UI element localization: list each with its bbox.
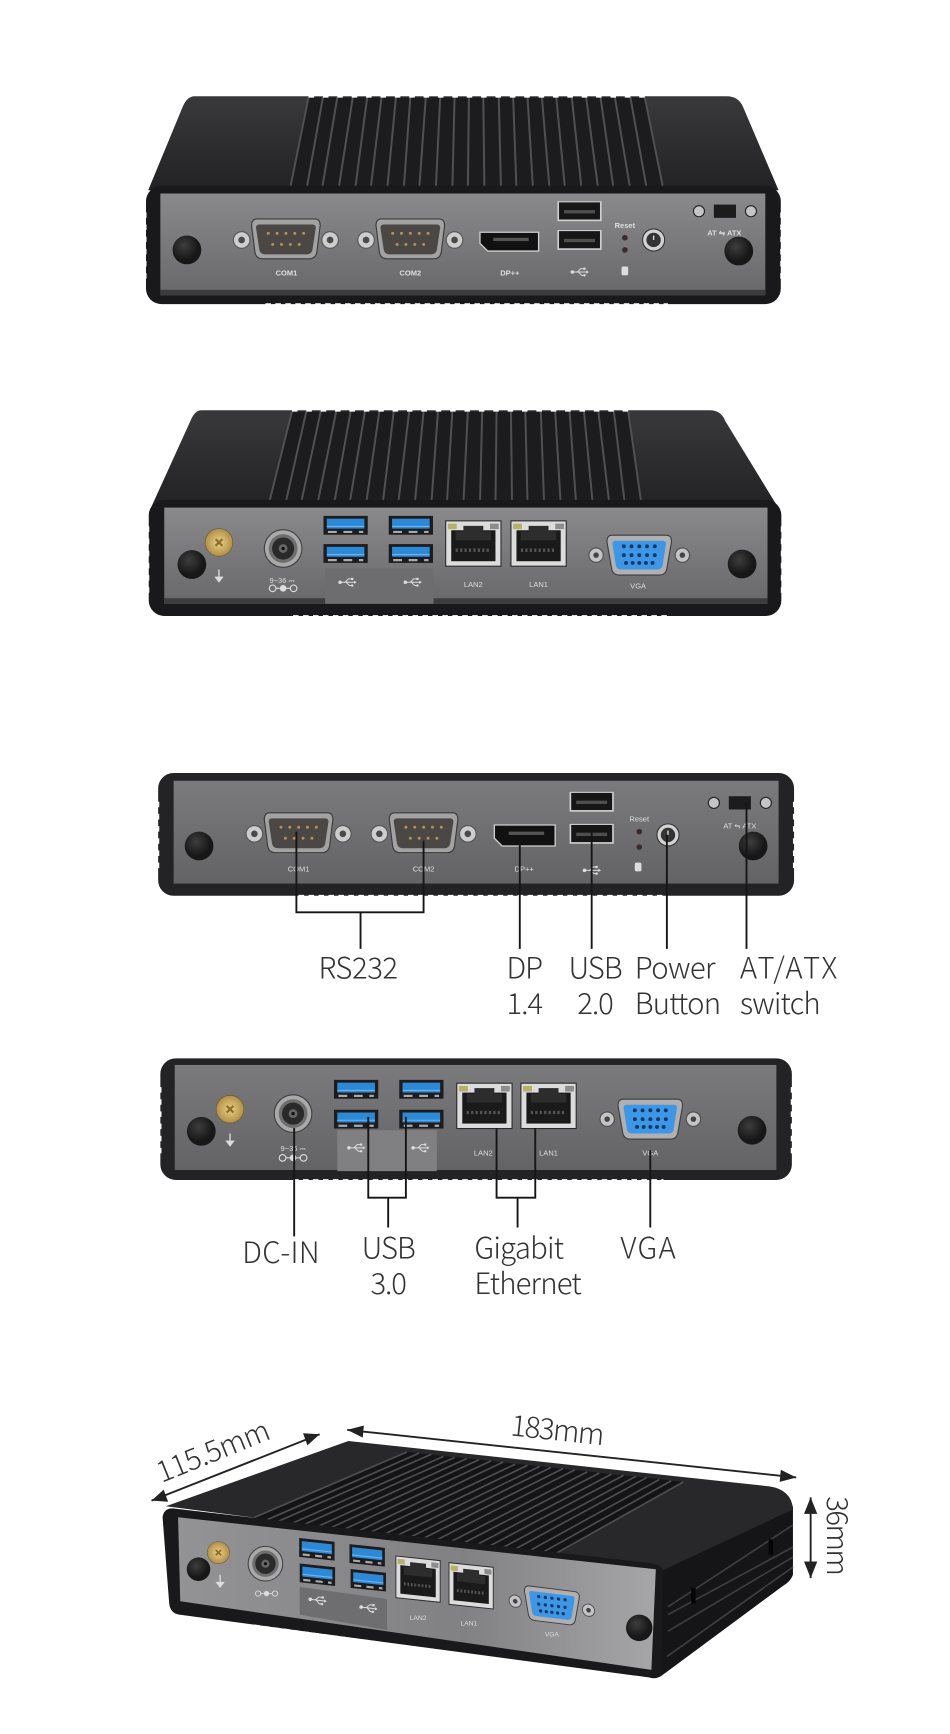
device 1 front panel	[160, 194, 765, 295]
panel labels: 9~36 ⎓	[281, 1144, 307, 1153]
storage icon	[635, 863, 641, 871]
label: Gigabit Ethernet	[474, 1225, 582, 1303]
USB 3.0 ports	[323, 516, 433, 563]
DC jack	[264, 530, 302, 567]
label: AT/ATX switch: AT/ATX	[740, 946, 837, 988]
panel labels: VGA	[545, 1632, 559, 1639]
USB label patch	[325, 568, 434, 604]
foot right	[626, 1615, 652, 1641]
label: Gigabit Ethernet: Gigabit	[474, 1225, 564, 1267]
panel labels	[288, 815, 756, 873]
device 2: rear view with USB, LAN and VGA	[148, 410, 782, 617]
USB 2.0 lower	[557, 230, 602, 250]
label: DC-IN: DC-IN	[242, 1230, 320, 1272]
device 3: annotated front panel	[158, 773, 794, 896]
DisplayPort	[480, 232, 539, 251]
USB 3.0 ports	[334, 1080, 443, 1129]
dimension label: 183mm: 183mm	[509, 1403, 607, 1454]
panel labels: AT ⇋ ATX	[707, 229, 741, 238]
device 1 heat-sink fins	[290, 97, 664, 190]
device 5 front frame	[163, 1508, 664, 1678]
label: USB 2.0: USB	[568, 946, 623, 988]
USB 2.0 lower	[570, 824, 614, 844]
COM2 port	[371, 813, 476, 853]
label: DP 1.4: DP	[507, 946, 543, 988]
label: Power Button	[635, 946, 721, 1023]
side vents	[667, 1525, 793, 1657]
label: VGA: VGA	[620, 1225, 676, 1267]
power button	[657, 824, 679, 846]
label: DP 1.4	[507, 946, 543, 1023]
LAN1 port	[511, 521, 566, 566]
USB 2.0 upper	[557, 201, 602, 221]
panel labels: Reset	[615, 221, 636, 230]
device 5 heat-sink fins	[252, 1452, 683, 1558]
label: USB 2.0: 2.0	[577, 981, 614, 1023]
device 4: annotated rear panel	[160, 1058, 792, 1181]
dimension label: 36mm: 36mm	[818, 1496, 860, 1576]
USB icon	[583, 866, 601, 875]
device 3 frame	[158, 773, 794, 896]
LAN1 port	[449, 1563, 493, 1609]
panel labels: DP++	[515, 864, 534, 873]
VGA port	[509, 1584, 595, 1628]
panel labels: VGA	[630, 581, 646, 590]
device 5 top surface	[166, 1441, 793, 1570]
DisplayPort	[494, 825, 555, 846]
panel labels: 9~36 ⎓	[270, 576, 296, 585]
DC jack	[248, 1546, 283, 1581]
foot right	[728, 550, 756, 578]
leader lines: front panel	[296, 802, 747, 949]
device 2 heat-sink fins	[269, 411, 641, 504]
panel labels	[276, 221, 741, 277]
LED indicators	[622, 238, 627, 250]
USB label patch	[300, 1587, 387, 1630]
foot right	[738, 1116, 766, 1145]
bottom teeth	[254, 1626, 653, 1680]
ground symbol	[217, 1575, 223, 1587]
device 5: perspective view with dimensions	[163, 1441, 793, 1680]
power button	[643, 229, 665, 251]
USB icons	[347, 1143, 430, 1152]
label: AT/ATX switch	[740, 946, 837, 1023]
dimension: length arrow 183mm	[347, 1425, 796, 1482]
LAN2 port	[446, 521, 501, 566]
label: Power Button: Button	[635, 981, 721, 1023]
panel labels: VGA	[642, 1149, 658, 1158]
USB icons	[338, 578, 422, 587]
power rating icon	[269, 585, 297, 592]
DC jack	[274, 1095, 312, 1132]
label: Power Button: Power	[635, 946, 716, 988]
foot right	[724, 237, 753, 265]
device 3 panel	[174, 781, 779, 884]
ground screw	[205, 529, 233, 556]
panel labels: LAN2	[464, 580, 483, 589]
panel labels	[281, 1144, 658, 1158]
USB label patch	[337, 1130, 437, 1171]
COM1 port	[233, 219, 338, 259]
panel labels: LAN2	[474, 1149, 493, 1158]
label: Gigabit Ethernet: Ethernet	[474, 1261, 582, 1303]
device 4 frame	[160, 1058, 792, 1180]
panel labels: LAN1	[539, 1149, 558, 1158]
foot left	[187, 1117, 216, 1146]
ground symbol	[216, 570, 222, 582]
panel labels	[270, 576, 646, 590]
LAN1 port	[521, 1083, 576, 1129]
USB icons	[308, 1595, 378, 1614]
leader lines: rear panel	[294, 1117, 650, 1236]
USB icon	[571, 268, 589, 277]
COM1 port	[246, 813, 351, 853]
panel labels: COM2	[413, 864, 434, 873]
USB 3.0 ports	[299, 1538, 386, 1592]
device 1 front frame	[146, 186, 781, 304]
LAN2 port	[396, 1556, 440, 1602]
power rating icon	[255, 1591, 278, 1596]
device 2 front panel	[164, 508, 768, 604]
label: USB 3.0	[362, 1225, 416, 1303]
dimension: width arrow 115.5mm	[152, 1433, 320, 1502]
foot left	[178, 550, 206, 579]
device 1 top surface	[148, 96, 779, 190]
panel labels: LAN1	[529, 580, 548, 589]
VGA port	[600, 1099, 701, 1139]
label: AT/ATX switch: switch	[740, 981, 821, 1023]
device 4 panel	[175, 1065, 776, 1170]
device 5 front panel	[178, 1517, 656, 1670]
panel labels: Reset	[629, 815, 650, 824]
dimension: height arrow 36mm	[804, 1497, 817, 1578]
label: USB 3.0: 3.0	[370, 1261, 407, 1303]
LAN2 port	[457, 1083, 512, 1129]
foot left	[173, 236, 201, 264]
USB 2.0 upper	[570, 792, 614, 812]
panel labels: AT ⇋ ATX	[723, 821, 756, 830]
device 2 top surface	[152, 410, 777, 506]
ground screw	[216, 1095, 244, 1123]
power rating icon	[279, 1155, 307, 1161]
label: USB 2.0	[568, 946, 623, 1023]
label: USB 3.0: USB	[362, 1225, 416, 1267]
panel labels: DP++	[500, 268, 520, 277]
panel labels: COM1	[288, 864, 309, 873]
dimension label: 115.5mm: 115.5mm	[149, 1408, 276, 1491]
panel labels: LAN1	[461, 1621, 478, 1628]
AT/ATX switch	[708, 796, 771, 809]
panel labels	[410, 1615, 559, 1639]
panel labels: COM1	[276, 268, 297, 277]
storage icon	[622, 267, 628, 275]
foot left	[185, 832, 213, 860]
device 1: front view with serial ports	[145, 96, 781, 305]
panel labels: COM2	[399, 268, 421, 277]
label: DP 1.4: 1.4	[507, 981, 543, 1023]
foot right	[739, 832, 768, 860]
VGA port	[589, 535, 690, 575]
ground screw	[207, 1542, 229, 1564]
label: RS232: RS232	[319, 946, 398, 988]
foot left	[187, 1557, 210, 1581]
COM2 port	[358, 219, 463, 259]
device 2 front frame	[149, 500, 781, 616]
device 5 side face	[650, 1506, 793, 1678]
AT/ATX switch	[693, 205, 756, 218]
ground symbol	[227, 1134, 233, 1146]
panel labels: LAN2	[410, 1615, 427, 1622]
LED indicators	[637, 832, 642, 847]
